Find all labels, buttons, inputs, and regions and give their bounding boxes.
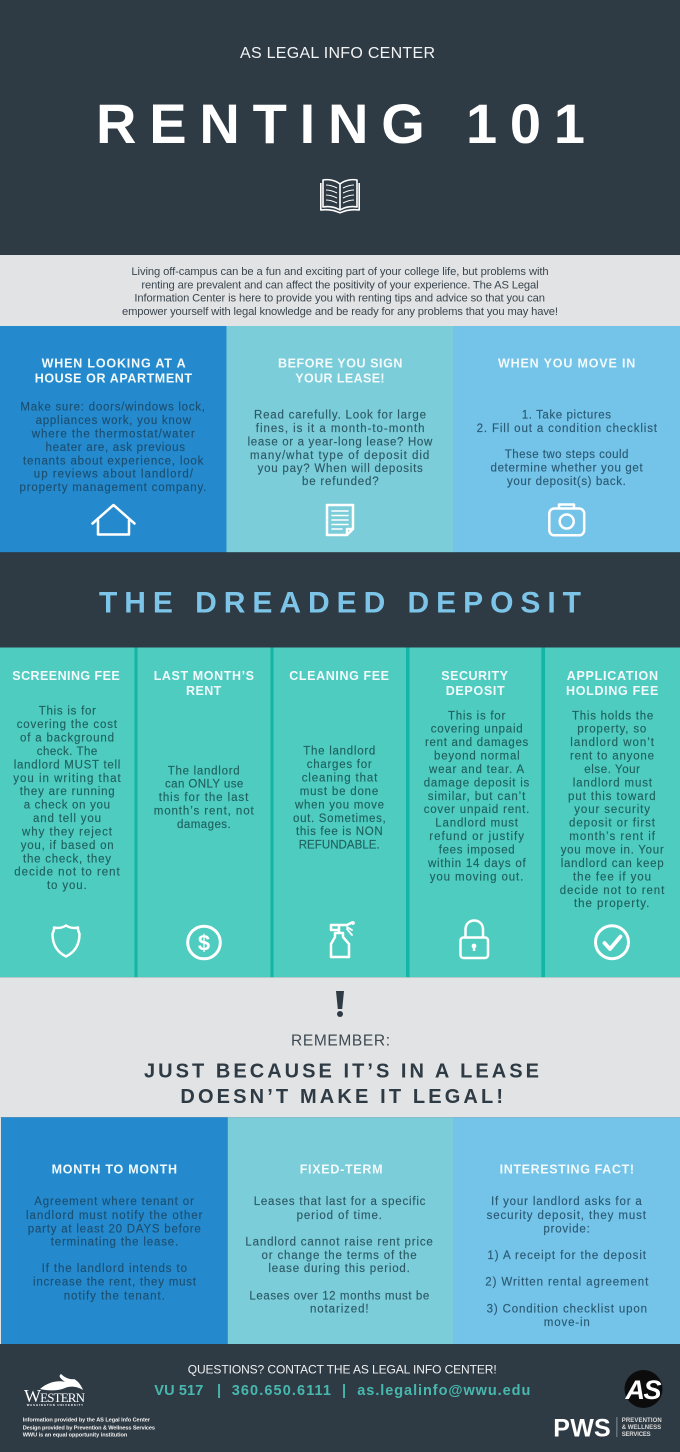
icon: document: [327, 505, 353, 535]
body text: [485, 1196, 649, 1329]
panel: screening fee: [0, 648, 134, 977]
contact details: |: [217, 1383, 221, 1399]
heading: MONTH TO MONTH: [52, 1163, 177, 1177]
body text: fees imposed: [439, 844, 515, 856]
panel: last month's rent: [138, 648, 270, 977]
body text: damage deposit is: [424, 777, 530, 789]
body text: Agreement where tenant or: [34, 1196, 194, 1208]
body text: this fee is NON: [296, 826, 383, 838]
body text: provide:: [543, 1224, 590, 1236]
body text: heater are, ask previous: [46, 442, 185, 454]
contact details: |: [342, 1383, 346, 1399]
body text: else. Your: [584, 764, 640, 776]
body text: be refunded?: [302, 476, 379, 488]
body text: charges for: [307, 759, 372, 771]
panel: introduction: [0, 255, 680, 326]
intro text: Information Center is here to provide you with renting tips and advice so that you can: [134, 292, 545, 304]
body text: lease during this period.: [268, 1263, 410, 1275]
logo: AS: AS: [624, 1375, 662, 1405]
intro text: Living off-campus can be a fun and exciting part of your college life, but problems with: [131, 266, 549, 278]
body text: you move in. Your: [561, 844, 664, 856]
contact details: [154, 1383, 530, 1399]
body text: notarized!: [310, 1304, 369, 1316]
body text: where the thermostat/water: [31, 428, 195, 440]
body text: move-in: [544, 1317, 590, 1329]
heading: BEFORE YOU SIGN: [278, 356, 402, 370]
body text: [13, 706, 121, 892]
heading: RENT: [186, 684, 222, 698]
body text: when you move: [294, 799, 384, 811]
body text: covering the cost: [17, 719, 118, 731]
body text: must be done: [300, 786, 378, 798]
logo: Western Washington University: WASHINGTON UNIVERSITY: [27, 1403, 83, 1407]
body text: lease or a year-long lease? How: [248, 436, 433, 448]
body text: out. Sometimes,: [293, 813, 386, 825]
panel: month to month: [0, 1117, 228, 1344]
body text: rent to anyone: [570, 751, 654, 763]
body text: to you.: [47, 880, 87, 892]
subtitle: AS LEGAL INFO CENTER: [240, 45, 435, 62]
body text: This is for: [448, 710, 505, 722]
panel: dreaded deposit heading band: [0, 552, 680, 648]
divider: [542, 648, 545, 977]
body text: the property.: [574, 898, 649, 910]
body text: or change the terms of the: [262, 1250, 417, 1262]
body text: These two steps could: [505, 449, 628, 461]
body text: refund or justify: [429, 831, 524, 843]
body text: 1) A receipt for the deposit: [487, 1250, 647, 1262]
body text: landlord must: [573, 777, 653, 789]
body text: fines, is it a month-to-month: [256, 423, 424, 435]
callout: [144, 1061, 539, 1108]
body text: covering unpaid: [431, 724, 523, 736]
icon: house: [92, 505, 134, 534]
body text: your deposit(s) back.: [507, 476, 626, 488]
callout: JUST BECAUSE IT’S IN A LEASE: [144, 1061, 539, 1083]
body text: you, if based on: [21, 840, 114, 852]
body text: REFUNDABLE.: [299, 840, 380, 852]
heading: [566, 669, 658, 698]
heading: [278, 356, 402, 386]
body text: beyond normal: [434, 751, 520, 763]
body text: [245, 1196, 433, 1316]
heading: WHEN YOU MOVE IN: [498, 356, 635, 370]
icon: padlock: [460, 920, 488, 958]
icon: open book: [321, 180, 359, 213]
panel: footer: [0, 1344, 680, 1452]
body text: your security: [574, 804, 650, 816]
body text: The landlord: [168, 765, 240, 777]
panel: cleaning fee: [274, 648, 406, 977]
logo: PWS: SERVICES: [622, 1432, 651, 1438]
heading: HOLDING FEE: [566, 684, 658, 698]
heading: SECURITY: [441, 669, 509, 683]
heading: SCREENING FEE: [12, 669, 120, 683]
contact details: as.legalinfo@wwu.edu: [357, 1383, 530, 1399]
body text: of a background: [20, 732, 114, 744]
intro text: [122, 266, 558, 318]
body text: many/what type of deposit did: [250, 450, 429, 462]
body text: property, so: [577, 724, 646, 736]
body text: 2) Written rental agreement: [485, 1277, 649, 1289]
body text: they are running: [20, 786, 115, 798]
body text: landlord must notify the other: [26, 1210, 203, 1222]
panel: security deposit: [409, 648, 542, 977]
credits: [23, 1418, 155, 1439]
body text: deposit or first: [569, 818, 656, 830]
divider: [406, 648, 409, 977]
body text: 2. Fill out a condition checklist: [477, 423, 658, 435]
body text: cover unpaid rent.: [424, 804, 529, 816]
body text: notify the tenant.: [64, 1290, 165, 1302]
icon: dollar coin: $: [198, 930, 210, 956]
body text: 1. Take pictures: [522, 410, 611, 422]
body text: this for the last: [159, 792, 249, 804]
heading: THE DREADED DEPOSIT: [99, 586, 581, 619]
contact details: VU 517: [154, 1383, 203, 1399]
body text: up reviews about landlord/: [34, 468, 194, 480]
body text: you pay? When will deposits: [258, 463, 423, 475]
heading: [35, 356, 192, 386]
body text: decide not to rent: [560, 885, 665, 897]
body text: Leases that last for a specific: [254, 1196, 426, 1208]
body text: [477, 410, 658, 488]
icon: check mark: [596, 926, 628, 959]
body text: [560, 710, 665, 910]
icon: shield: [52, 926, 80, 956]
body text: why they reject: [21, 826, 113, 838]
body text: [248, 410, 433, 488]
body text: This is for: [39, 706, 96, 718]
body text: [26, 1196, 203, 1302]
body text: 3) Condition checklist upon: [487, 1304, 647, 1316]
body text: determine whether you get: [490, 462, 643, 474]
body text: rent and damages: [425, 737, 529, 749]
credits: Information provided by the AS Legal Info Center: [23, 1418, 151, 1424]
body text: you moving out.: [430, 871, 523, 883]
body text: property management company.: [20, 482, 206, 494]
heading: YOUR LEASE!: [295, 372, 385, 386]
contact details: 360.650.6111: [232, 1383, 331, 1399]
heading: APPLICATION: [567, 669, 658, 683]
heading: WHEN LOOKING AT A: [42, 356, 186, 370]
callout: DOESN’T MAKE IT LEGAL!: [180, 1086, 503, 1108]
body text: cleaning that: [302, 772, 378, 784]
body text: appliances work, you know: [36, 415, 192, 427]
heading: INTERESTING FACT!: [500, 1163, 634, 1177]
heading: [441, 669, 509, 698]
intro text: empower yourself with legal knowledge and be ready for any problems that you may have!: [122, 306, 558, 318]
body text: Read carefully. Look for large: [254, 410, 426, 422]
divider: [270, 648, 274, 977]
body text: Landlord must: [435, 818, 519, 830]
body text: similar, but can’t: [428, 791, 526, 803]
body text: month’s rent if: [569, 831, 656, 843]
heading: DEPOSIT: [446, 684, 505, 698]
body text: the check, they: [23, 853, 111, 865]
icon: camera: [549, 504, 584, 535]
body text: landlord can keep: [561, 858, 664, 870]
body text: This holds the: [572, 710, 653, 722]
body text: [424, 710, 530, 883]
panel: when you move in: [453, 326, 680, 552]
body text: put this toward: [568, 791, 656, 803]
panel: when looking at a house or apartment: [0, 326, 226, 552]
panel: application holding fee: [545, 648, 680, 977]
body text: increase the rent, they must: [33, 1277, 197, 1289]
body text: period of time.: [297, 1210, 382, 1222]
panel: remember: [0, 977, 680, 1117]
body text: landlord MUST tell: [14, 759, 120, 771]
body text: Leases over 12 months must be: [249, 1290, 429, 1302]
panel: header: [0, 0, 680, 255]
body text: [20, 402, 206, 494]
body text: the fee if you: [573, 871, 651, 883]
logo: PWS: [553, 1415, 662, 1443]
body text: [293, 746, 386, 852]
body text: If your landlord asks for a: [491, 1196, 642, 1208]
intro text: renting are prevalent and can affect the positivity of your experience. The AS Legal: [141, 279, 539, 291]
remember label: REMEMBER:: [291, 1033, 390, 1050]
panel: fixed-term: [228, 1117, 453, 1344]
body text: [154, 765, 254, 831]
heading: HOUSE OR APARTMENT: [35, 372, 192, 386]
logo: Western Washington University: WESTERN: [24, 1386, 86, 1406]
contact heading: QUESTIONS? CONTACT THE AS LEGAL INFO CENTER!: [188, 1362, 497, 1376]
body text: within 14 days of: [427, 858, 526, 870]
body text: Landlord cannot raise rent price: [245, 1236, 433, 1248]
heading: [154, 669, 254, 698]
credits: Design provided by Prevention & Wellness Services: [23, 1425, 155, 1431]
body text: The landlord: [303, 746, 375, 758]
credits: WWU is an equal opportunity institution: [23, 1433, 128, 1439]
logo: PWS: & WELLNESS: [622, 1425, 661, 1431]
heading: LAST MONTH’S: [154, 669, 254, 683]
body text: security deposit, they must: [487, 1210, 647, 1222]
body text: If the landlord intends to: [42, 1263, 187, 1275]
icon: spray bottle: [331, 922, 354, 957]
body text: party at least 20 DAYS before: [28, 1224, 201, 1236]
body text: terminating the lease.: [51, 1236, 178, 1248]
heading: CLEANING FEE: [289, 669, 389, 683]
icon: exclamation mark: [336, 991, 344, 1017]
heading: FIXED-TERM: [300, 1163, 382, 1177]
title: RENTING 101: [96, 92, 585, 155]
body text: you in writing that: [13, 773, 121, 785]
body text: decide not to rent: [14, 867, 120, 879]
panel: before you sign your lease: [226, 326, 453, 552]
body text: check. The: [37, 746, 97, 758]
logo: Western Washington University: [24, 1374, 86, 1407]
divider: [134, 648, 138, 977]
logo: PWS: PREVENTION: [622, 1418, 662, 1424]
body text: Make sure: doors/windows lock,: [20, 402, 205, 414]
body text: and tell you: [33, 813, 101, 825]
body text: can ONLY use: [165, 779, 243, 791]
body text: landlord won’t: [570, 737, 655, 749]
body text: damages.: [177, 819, 231, 831]
logo: PWS: PWS: [553, 1415, 611, 1443]
body text: wear and tear. A: [428, 764, 524, 776]
icon: dollar coin: [188, 926, 220, 959]
panel: interesting fact: [453, 1117, 680, 1344]
body text: tenants about experience, look: [23, 456, 204, 468]
body text: month’s rent, not: [154, 806, 254, 818]
body text: a check on you: [24, 800, 110, 812]
